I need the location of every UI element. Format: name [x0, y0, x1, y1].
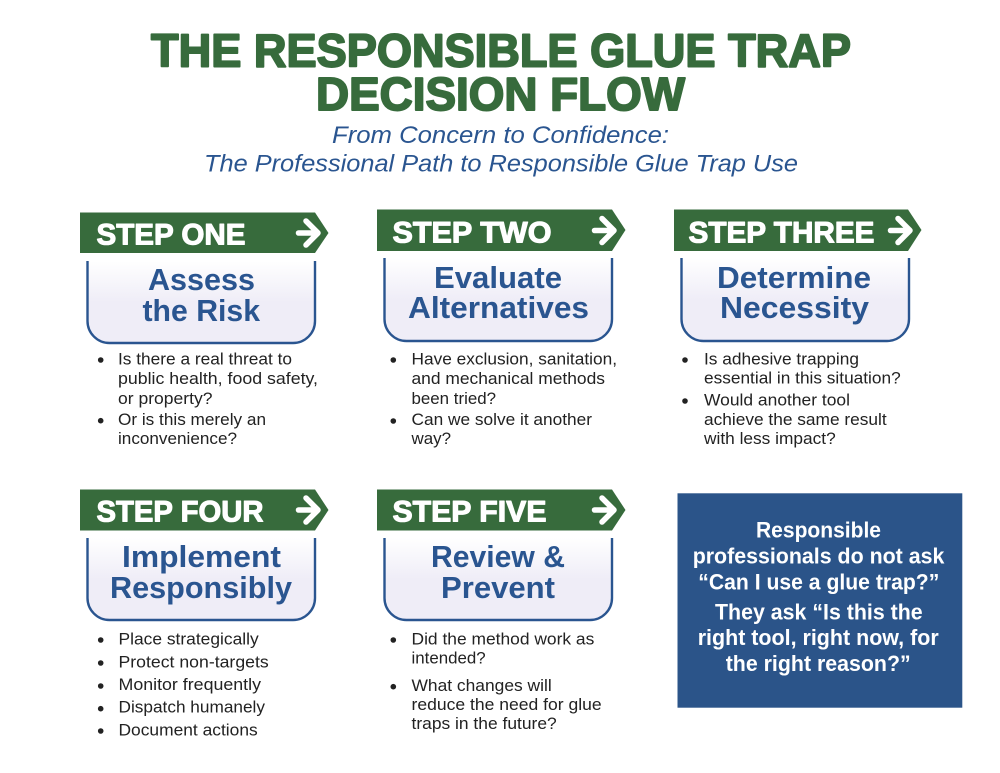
bullet list: step one: Or is this merely an: [118, 411, 266, 429]
card: evaluate alternatives: Evaluate: [434, 260, 562, 295]
banner: step three: STEP THREE: [688, 216, 874, 250]
callout: Responsible: [756, 517, 881, 542]
icon: arrow: [890, 218, 910, 242]
bullet list: step two: Can we solve it another: [412, 411, 593, 429]
card: determine necessity: Determine: [717, 260, 871, 295]
icon: arrow: [298, 498, 318, 522]
icon: arrow: [298, 221, 318, 245]
bullet list: step two: Have exclusion, sanitation,: [412, 350, 617, 368]
bullet list: step four: [98, 630, 269, 740]
icon: arrow: [594, 218, 614, 242]
panel: step three: [674, 210, 922, 448]
banner: step three: [674, 210, 922, 251]
bullet list: step four: Dispatch humanely: [118, 699, 266, 717]
bullet list: step five: traps in the future?: [412, 715, 557, 733]
card: review and prevent: Prevent: [441, 570, 555, 605]
card: review and prevent: [384, 538, 612, 620]
subtitle: From Concern to Confidence:: [332, 122, 669, 149]
panel: step four: [80, 490, 328, 740]
card: evaluate alternatives: [384, 258, 612, 341]
bullet list: step one: [98, 350, 318, 448]
bullet list: step five: What changes will: [412, 677, 552, 695]
banner: step two: [377, 210, 626, 251]
bullet list: step five: [390, 630, 602, 733]
banner: step one: STEP ONE: [96, 218, 246, 252]
bullet list: step three: Would another tool: [704, 392, 850, 410]
subtitle: The Professional Path to Responsible Glue Trap Use: [204, 150, 798, 178]
bullet list: step five: Did the method work as: [412, 630, 594, 648]
title: [151, 24, 851, 120]
bullet list: step two: been tried?: [412, 390, 496, 408]
callout: professionals do not ask: [693, 543, 945, 568]
bullet list: step two: [390, 350, 617, 448]
bullet list: step three: [682, 350, 901, 448]
panel: step five: [377, 490, 626, 733]
banner: step one: [80, 212, 328, 253]
callout: [678, 493, 962, 708]
callout: “Can I use a glue trap?”: [698, 569, 939, 594]
card: evaluate alternatives: Alternatives: [408, 290, 589, 325]
icon: arrow: [594, 498, 614, 522]
bullet list: step four: Protect non-targets: [118, 653, 269, 671]
callout: They ask “Is this the: [715, 599, 923, 624]
bullet list: step three: with less impact?: [703, 430, 836, 448]
banner: step four: [80, 490, 328, 530]
bullet list: step four: Monitor frequently: [118, 676, 262, 694]
card: assess the risk: Assess: [148, 262, 255, 297]
bullet list: step five: reduce the need for glue: [412, 696, 602, 714]
subtitle: [204, 122, 798, 178]
bullet list: step three: achieve the same result: [704, 411, 887, 429]
card: implement responsibly: Responsibly: [110, 570, 293, 605]
callout: the right reason?”: [726, 651, 911, 676]
bullet list: step one: inconvenience?: [118, 430, 237, 448]
bullet list: step one: public health, food safety,: [118, 370, 318, 388]
bullet list: step four: Document actions: [118, 722, 258, 740]
bullet list: step three: Is adhesive trapping: [704, 350, 859, 368]
bullet list: step two: way?: [410, 430, 451, 448]
card: determine necessity: [682, 258, 909, 341]
panel: step one: [80, 212, 328, 448]
bullet list: step five: intended?: [412, 650, 486, 668]
title: THE RESPONSIBLE GLUE TRAP: [151, 24, 851, 76]
bullet list: step one: Is there a real threat to: [118, 350, 292, 368]
banner: step two: STEP TWO: [392, 216, 552, 250]
banner: step five: [377, 490, 626, 530]
banner: step five: STEP FIVE: [392, 496, 546, 528]
bullet list: step two: and mechanical methods: [412, 370, 605, 388]
title: DECISION FLOW: [316, 68, 685, 120]
bullet list: step four: Place strategically: [118, 630, 259, 648]
card: assess the risk: [88, 261, 315, 343]
card: determine necessity: Necessity: [720, 290, 870, 325]
bullet list: step three: essential in this situation?: [704, 370, 901, 388]
card: assess the risk: the Risk: [142, 293, 261, 328]
card: implement responsibly: Implement: [122, 539, 281, 574]
card: review and prevent: Review &: [431, 539, 565, 574]
panel: step two: [377, 210, 626, 448]
card: implement responsibly: [88, 538, 315, 620]
banner: step four: STEP FOUR: [96, 496, 264, 528]
bullet list: step one: or property?: [118, 390, 212, 408]
callout: right tool, right now, for: [698, 625, 939, 650]
